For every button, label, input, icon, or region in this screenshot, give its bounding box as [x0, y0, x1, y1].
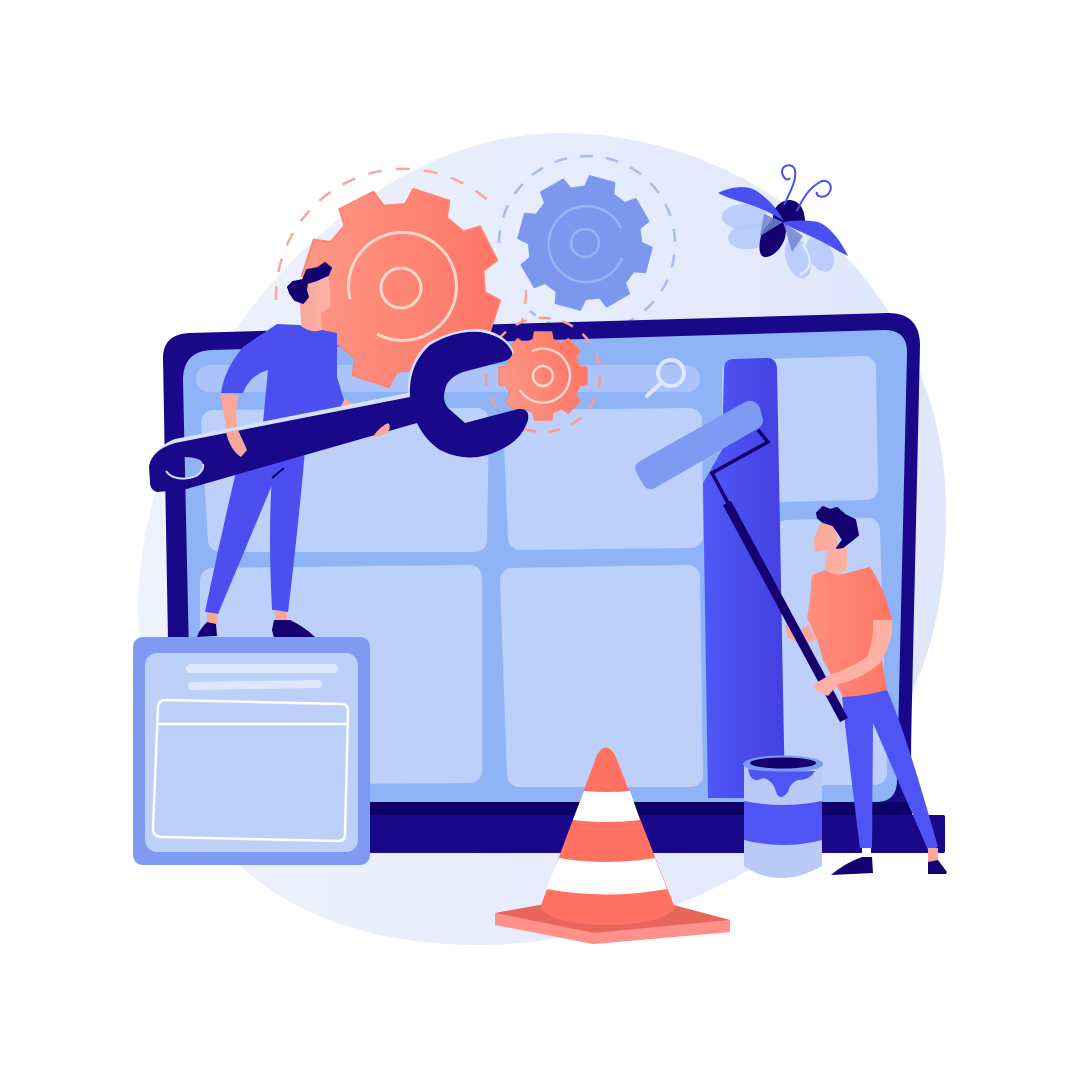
- cone white stripes: [546, 791, 667, 894]
- man with roller: [727, 503, 947, 875]
- monitor screen: [183, 330, 907, 802]
- icon: bug: [718, 165, 848, 282]
- traffic cone: [495, 748, 730, 944]
- man 1 shirt: [221, 324, 344, 423]
- bug upper wings: [718, 187, 848, 256]
- wrench highlight: [150, 329, 514, 462]
- man 1 arm: [220, 394, 250, 457]
- roller pole: [727, 503, 844, 720]
- cone base: [495, 905, 730, 944]
- man 2 legs: [842, 690, 938, 850]
- bucket paint: [750, 758, 816, 768]
- gear: small coral: [499, 332, 587, 420]
- man 1 shoes: [197, 610, 316, 638]
- bug wing highlight: [800, 244, 810, 274]
- board text lines: [186, 664, 338, 690]
- man 2 hair: [817, 507, 858, 548]
- bucket band: [744, 801, 822, 845]
- man 2 front arm: [814, 620, 892, 696]
- wrench body: [149, 332, 528, 492]
- gear: large coral: [278, 165, 524, 411]
- man 2 socks and shoes: [831, 848, 947, 875]
- icon: magnifier: [647, 360, 684, 396]
- man 1 legs: [205, 440, 306, 614]
- gear: blue: [505, 163, 665, 323]
- board panel: [145, 653, 358, 852]
- board frame: [133, 637, 370, 865]
- man 1 hand on wrench: [373, 423, 390, 437]
- cone body: [540, 748, 675, 925]
- dashed orbit: large gear: [276, 169, 526, 322]
- board window outline: [153, 700, 348, 841]
- man 2 neck and face: [814, 523, 847, 575]
- monitor frame: [163, 313, 920, 815]
- man 2 shirt: [807, 567, 892, 697]
- bucket rim: [743, 756, 823, 772]
- bug wing overlay: [760, 214, 803, 252]
- roller: wire frame: [712, 430, 768, 503]
- paint drip: [748, 769, 815, 797]
- paint bucket: [743, 756, 823, 878]
- monitor base bar: [360, 802, 945, 853]
- man 2 back arm: [785, 623, 816, 645]
- roller head: [635, 401, 763, 489]
- bug lower wings: [722, 203, 840, 282]
- search bar: [196, 365, 700, 392]
- painted stripe: [703, 358, 785, 798]
- bug antennae: [782, 165, 831, 211]
- bug body: [759, 200, 805, 257]
- man 1 neck and face: [298, 270, 330, 333]
- wrench hole arc: [166, 464, 203, 479]
- website cards: [212, 368, 875, 775]
- dashed orbit: small gear: [486, 318, 600, 432]
- bucket body: [744, 764, 822, 878]
- man 1 hair: [288, 263, 331, 303]
- maintenance board: [133, 637, 370, 865]
- dashed orbit: blue gear: [499, 156, 675, 332]
- man with wrench: [197, 263, 353, 638]
- man 1 other arm: [337, 395, 353, 410]
- wrench: [149, 329, 528, 492]
- background blob: [138, 133, 946, 945]
- wrench holding hands: [226, 430, 247, 457]
